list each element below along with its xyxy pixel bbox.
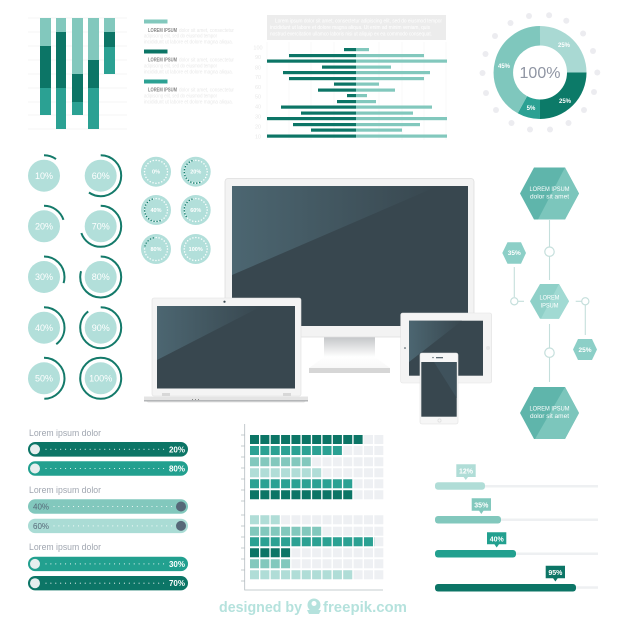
bar 4 [88, 18, 99, 129]
legend item 3 [144, 80, 234, 106]
progress 12%: 12% [459, 468, 474, 476]
middle hexagon: LOREM [540, 296, 560, 302]
legend item 1: dolor sit amet, consectetur [179, 28, 234, 34]
progress 95%: 95% [548, 570, 563, 577]
right light bars [356, 48, 447, 138]
middle hexagon [530, 284, 569, 319]
donut chart [480, 12, 600, 133]
dotted gauge 60%: 60% [190, 208, 201, 214]
slider 80% [28, 461, 188, 476]
slider 20%: 20% [169, 445, 185, 454]
axis labels: 90 [255, 55, 261, 61]
bar 3 [72, 18, 83, 115]
gauge 80%: 80% [92, 272, 110, 282]
legend item 1: adipiscing elit, sed do eiusmod tempor [144, 34, 217, 40]
slider 40%: 40% [33, 502, 49, 512]
chart header: incididunt ut labore et dolore magna aliqua. Ut enim ad minim veniam, quis [270, 25, 430, 31]
slider 30%: 30% [169, 560, 185, 569]
right small hexagon [573, 339, 597, 360]
gauge 40%: 40% [35, 323, 53, 333]
dotted gauge 80%: 80% [150, 247, 162, 253]
legend item 2 [144, 50, 234, 76]
slider 20% [28, 442, 188, 457]
monitor stand [309, 337, 390, 373]
slider 60% [28, 519, 188, 533]
bar 1 [40, 18, 51, 115]
device: desktop monitor [225, 178, 474, 373]
slider 30% [28, 557, 188, 571]
legend item 3: incididunt ut labore et dolore magna aliqua. [144, 100, 233, 106]
axis labels: 30 [255, 114, 261, 120]
slider 70% [28, 576, 188, 590]
slider 80%: 80% [169, 464, 185, 474]
left small hexagon [502, 242, 526, 264]
dotted gauge 20%: 20% [190, 170, 201, 176]
gauge 70% [80, 206, 121, 247]
axis labels: 60 [255, 85, 261, 91]
axis labels: 10 [255, 134, 261, 140]
axis labels: 50 [255, 94, 261, 100]
bar 2 [56, 18, 66, 129]
donut labels: 25% [558, 43, 571, 49]
legend item 1: LOREM IPSUM [148, 28, 177, 34]
gauge 90%: 90% [92, 323, 110, 333]
hexagon flow diagram [502, 168, 597, 439]
filled cells upper group [250, 440, 364, 495]
footer credit: freepik.com [323, 600, 407, 616]
legend item 2: dolor sit amet, consectetur [179, 58, 234, 64]
connector lines [514, 220, 585, 382]
device: phone [420, 353, 458, 424]
middle hexagon: IPSUM [540, 304, 558, 310]
bottom hexagon: LOREM IPSUM [530, 406, 570, 412]
axis labels: 100 [253, 46, 263, 52]
chart header [267, 15, 446, 40]
gauge 80% [80, 256, 121, 298]
top hexagon: dolor sit amet [530, 194, 569, 200]
laptop hinges [162, 393, 291, 396]
footer credit [219, 598, 407, 616]
top hexagon [520, 168, 579, 220]
gauge 100% [80, 358, 121, 399]
connector nodes [511, 247, 589, 357]
percentage ring gauges [24, 155, 121, 399]
legend item 2: adipiscing elit, sed do eiusmod tempor [144, 64, 217, 70]
axis labels: 70 [255, 75, 261, 81]
chart header: Lorem ipsum dolor sit amet, consectetur adipiscing elit, sed do eiusmod tempor [275, 18, 442, 24]
axis labels: 20 [255, 124, 261, 130]
gauge 70%: 70% [92, 222, 110, 232]
dotted gauge 40%: 40% [150, 208, 162, 214]
legend item 1: incididunt ut labore et dolore magna aliqua. [144, 40, 233, 46]
slider heading 2: Lorem ipsum dolor [29, 485, 101, 495]
donut labels: 45% [498, 64, 511, 70]
monitor screen [232, 186, 468, 326]
gauge 60%: 60% [92, 171, 110, 181]
stacked bar chart [28, 18, 127, 129]
gauge 30% [24, 256, 64, 298]
legend item 2: incididunt ut labore et dolore magna aliqua. [144, 70, 233, 76]
donut labels [498, 43, 572, 112]
slider 60%: 60% [33, 522, 49, 531]
progress 40% [435, 532, 516, 558]
square grid chart [241, 424, 384, 590]
legend item 2: LOREM IPSUM [148, 58, 177, 64]
footer credit: designed by [219, 600, 302, 616]
legend item 3: dolor sit amet, consectetur [179, 88, 234, 94]
gauge 50%: 50% [35, 374, 53, 384]
bottom hexagon: dolor sit amet [530, 414, 569, 420]
laptop camera [223, 301, 226, 303]
legend item 1 [144, 20, 234, 46]
bottom hexagon [520, 387, 579, 439]
left small hexagon: 35% [508, 250, 521, 257]
left dark bars [267, 48, 356, 138]
progress 12% [435, 464, 485, 490]
gauge 60% [80, 155, 121, 196]
phone screen [421, 362, 457, 417]
dotted circle gauges [141, 157, 211, 264]
empty cells [250, 440, 384, 575]
gauge 20%: 20% [35, 222, 53, 232]
axis labels [253, 46, 263, 140]
donut segments [503, 36, 577, 109]
bar 5 [104, 18, 115, 74]
gauge 10%: 10% [35, 171, 53, 181]
chart header: nostrud exercitation ullamco laboris nisi ut aliquip ex ea commodo consequat. [270, 32, 432, 38]
gauge 10% [24, 155, 64, 196]
slider bars [28, 428, 188, 590]
butterfly bar chart [253, 15, 447, 140]
gauge 20% [24, 206, 64, 247]
top hexagon: LOREM IPSUM [530, 187, 570, 193]
progress 40%: 40% [490, 536, 504, 544]
phone speaker [432, 357, 443, 358]
slider 40% [28, 499, 188, 514]
axis labels: 80 [255, 66, 261, 72]
gauge 30%: 30% [35, 272, 53, 282]
progress tracks [435, 485, 598, 589]
laptop screen [157, 306, 295, 388]
tablet screen [409, 321, 483, 376]
right small hexagon: 25% [578, 347, 592, 354]
dotted gauge 100%: 100% [189, 247, 203, 253]
legend for stacked bars [144, 20, 234, 106]
laptop base [144, 396, 308, 402]
legend item 3: LOREM IPSUM [148, 88, 177, 94]
gauge 100%: 100% [89, 374, 112, 384]
gauge 40% [24, 307, 64, 348]
slider heading 1: Lorem ipsum dolor [29, 428, 101, 438]
donut labels: 5% [527, 106, 536, 112]
progress 95% [435, 566, 576, 592]
device: tablet [401, 313, 492, 383]
slider heading 3: Lorem ipsum dolor [29, 542, 101, 552]
dotted gauge 0%: 0% [152, 170, 160, 176]
donut total: 100% [520, 65, 560, 82]
slider 70%: 70% [169, 579, 185, 588]
gauge 50% [24, 358, 64, 399]
progress 35% [435, 498, 501, 524]
grid axes [241, 424, 383, 590]
device: laptop [144, 298, 308, 402]
icon: freepik logo [307, 598, 321, 614]
legend item 3: adipiscing elit, sed do eiusmod tempor [144, 94, 217, 100]
progress bars with tooltips [435, 464, 598, 592]
donut labels: 25% [559, 99, 572, 105]
axis labels: 40 [255, 104, 261, 110]
filled cells lower group [250, 520, 374, 575]
decorative dot ring [480, 12, 600, 133]
progress 35%: 35% [474, 502, 489, 510]
gauge 90% [80, 307, 121, 348]
